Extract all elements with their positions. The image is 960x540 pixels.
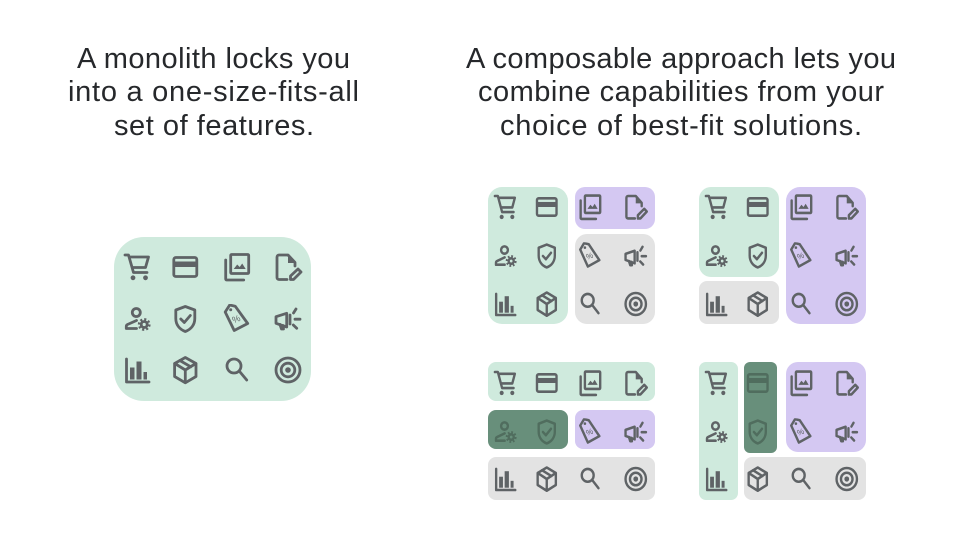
- icon: megaphone: [276, 309, 300, 329]
- panel: composable option 3: [488, 362, 655, 500]
- heading: monolith: set of features.: [114, 110, 314, 142]
- icon: cart: [495, 372, 515, 395]
- icon: payment card: [748, 374, 768, 392]
- icon: bar chart: [707, 294, 726, 315]
- icon: shield: [539, 245, 555, 267]
- icon: target: [276, 358, 300, 382]
- icon: target: [837, 293, 857, 315]
- panel: composable option 4: [699, 362, 866, 500]
- icon: user settings: [126, 308, 149, 330]
- icon: image gallery: [792, 372, 811, 395]
- icon: user settings: [707, 246, 726, 266]
- icon: cart: [495, 196, 515, 219]
- icon: user settings: [496, 246, 515, 266]
- icon: megaphone: [837, 423, 857, 441]
- icon: bar chart: [126, 359, 149, 382]
- icon: bar chart: [496, 469, 515, 490]
- icon: search: [793, 469, 810, 488]
- group: green vendor: [488, 187, 568, 324]
- icon: search: [582, 469, 598, 488]
- group: purple vendor: [786, 362, 866, 452]
- icon: bar chart: [496, 294, 515, 315]
- icon: document edit: [837, 372, 858, 394]
- icon: megaphone: [626, 423, 646, 441]
- heading: composable: A composable approach lets you: [466, 43, 896, 75]
- icon: document edit: [626, 196, 647, 218]
- group: green vendor: [699, 362, 738, 500]
- group: purple vendor: [786, 187, 866, 324]
- icon: package: [749, 468, 767, 491]
- icon: shield: [176, 306, 195, 332]
- icon: document edit: [626, 372, 647, 394]
- icon: package: [538, 293, 556, 316]
- icon: discount tag: [225, 305, 248, 330]
- icon: search: [793, 294, 810, 313]
- icon: payment card: [174, 258, 197, 276]
- icon: document edit: [837, 196, 858, 218]
- icon: cart: [125, 255, 148, 280]
- icon: search: [227, 359, 247, 380]
- heading: monolith: A monolith locks you: [77, 43, 350, 75]
- group: green vendor: [699, 187, 779, 277]
- group: green vendor: [488, 362, 655, 401]
- icon: package: [538, 468, 556, 491]
- icon: target: [837, 468, 857, 490]
- icon: target: [626, 293, 646, 315]
- icon: image gallery: [581, 372, 600, 395]
- icon: payment card: [748, 198, 768, 216]
- group: purple vendor: [575, 187, 655, 229]
- group: dark green vendor: [744, 362, 777, 453]
- panel: monolith feature set: [114, 237, 311, 401]
- icon: image gallery: [226, 254, 249, 280]
- icon: user settings: [496, 422, 515, 442]
- panel: composable option 2: [699, 187, 866, 324]
- heading: composable: choice of best-fit solutions.: [500, 110, 862, 142]
- icon: target: [626, 468, 646, 490]
- icon: payment card: [537, 198, 557, 216]
- icon: cart: [706, 372, 726, 395]
- icon: cart: [706, 196, 726, 219]
- heading: composable: combine capabilities from your: [478, 76, 884, 108]
- icon: search: [582, 294, 598, 313]
- icon: discount tag: [580, 419, 599, 443]
- icon: image gallery: [581, 196, 600, 219]
- group: gray vendor: [575, 234, 655, 324]
- icon: image gallery: [792, 196, 811, 219]
- icon: shield: [750, 421, 766, 443]
- icon: megaphone: [626, 247, 646, 265]
- icon: shield: [539, 421, 555, 443]
- group: purple vendor: [575, 410, 655, 449]
- icon: discount tag: [580, 243, 599, 267]
- icon: bar chart: [707, 469, 726, 490]
- panel: composable option 1: [488, 187, 655, 324]
- icon: package: [749, 293, 767, 316]
- icon: megaphone: [837, 247, 857, 265]
- icon: shield: [750, 245, 766, 267]
- heading: monolith: into a one-size-fits-all: [68, 76, 359, 108]
- group: gray vendor: [744, 457, 866, 500]
- icon: user settings: [707, 422, 726, 442]
- group: gray vendor: [699, 281, 779, 324]
- icon: discount tag: [791, 419, 810, 443]
- group: gray vendor: [488, 457, 655, 500]
- icon: document edit: [277, 255, 301, 280]
- group: dark green vendor: [488, 410, 568, 449]
- icon: payment card: [537, 374, 557, 392]
- icon: discount tag: [791, 243, 810, 267]
- icon: package: [175, 358, 196, 383]
